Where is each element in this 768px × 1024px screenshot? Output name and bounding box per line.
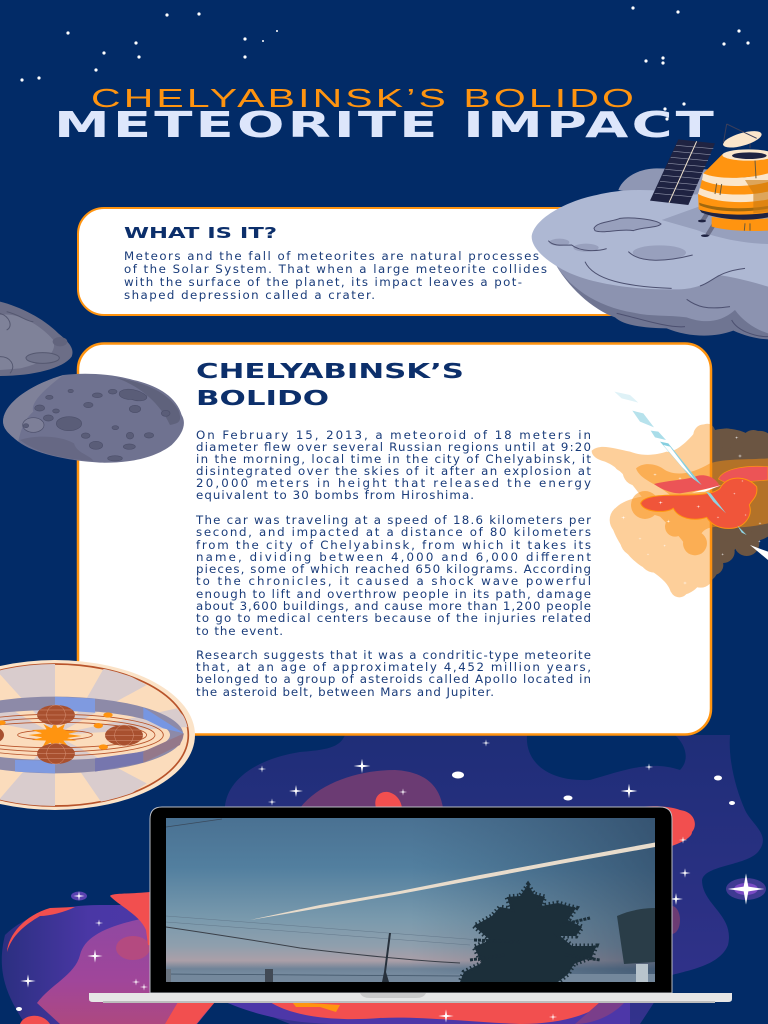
text block: paragraph 2: to go to medical centers because of the injuries related	[196, 611, 591, 625]
text block: paragraph 1: On February 15, 2013, a meteoroid of 18 meters in	[196, 428, 591, 442]
station body	[698, 149, 768, 231]
text block: paragraph 3: belonged to a group of asteroids called Apollo located in	[196, 672, 591, 686]
text block: definition	[124, 249, 547, 302]
panel: chelyabinsk's bolido	[78, 344, 711, 734]
asteroid with space station	[532, 124, 768, 339]
text block: definition: shaped depression called a crater.	[124, 288, 375, 302]
explosion sparks	[621, 436, 762, 585]
solar system	[0, 660, 195, 810]
text block: paragraph 2: from the city of Chelyabinsk, from which it takes its	[196, 538, 591, 552]
text block: paragraph 2: to the chronicles, it caused a shock wave powerful	[196, 574, 591, 588]
craters	[548, 218, 768, 337]
text block: paragraph 1: 20,000 meters in height that released the energy	[196, 476, 591, 490]
laptop frame	[150, 807, 672, 993]
sector wedges	[0, 663, 193, 810]
asteroid midsection	[553, 247, 768, 333]
text block: definition: of the Solar System. That when a large meteorite collides	[124, 262, 547, 276]
text block: paragraph 3: Research suggests that it was a condritic-type meteorite	[196, 648, 591, 662]
title line: Chelyabinsk's Bolido: CHELYABINSK’S BOLIDO	[91, 83, 637, 113]
heading: chelyabinsk's bolido: CHELYABINSK’S	[196, 359, 464, 383]
text block: paragraph 1: diameter flew over several Russian regions until at 9:20	[196, 440, 591, 454]
title line: Meteorite Impact: METEORITE IMPACT	[54, 105, 717, 146]
meteor streaks	[614, 392, 768, 560]
text block: definition: with the surface of the planet, its impact leaves a pot-	[124, 275, 522, 289]
asteroid rear hump	[618, 168, 740, 213]
outer blast cloud	[592, 424, 768, 597]
satellite dish	[721, 124, 763, 151]
text block: paragraph 2: pieces, some of which reached 650 kilograms. According	[196, 562, 591, 576]
text block: definition: Meteors and the fall of meteorites are natural processes	[124, 249, 539, 263]
middle blast cloud	[631, 458, 768, 555]
pine tree	[460, 885, 600, 982]
heading: chelyabinsk's bolido: BOLIDO	[196, 386, 329, 410]
meteor trail	[250, 842, 655, 920]
text block: paragraph 2: about 3,600 buildings, and cause more than 1,200 people	[196, 599, 591, 613]
asteroid underside	[553, 247, 768, 339]
text block: paragraph 1: disintegrated over the skies of it after an explosion at	[196, 464, 591, 478]
photo: meteor trail	[166, 818, 655, 982]
bottom nebula	[2, 735, 766, 1024]
title	[54, 83, 717, 146]
panel: what is it	[78, 208, 678, 315]
solar panel	[650, 139, 715, 205]
asteroid: partial upper left	[0, 302, 73, 376]
laptop base	[89, 993, 732, 1002]
laptop	[89, 807, 732, 1003]
station shadow	[662, 205, 768, 244]
asteroid: large	[3, 374, 184, 463]
text block: paragraph 2: name, dividing between 4,000 and 6,000 different	[196, 550, 591, 564]
text block: paragraph 1: equivalent to 30 bombs from Hiroshima.	[196, 488, 474, 502]
text block: paragraph 2: to the event.	[196, 624, 283, 638]
orbits	[0, 714, 163, 756]
text block: paragraph 3: the asteroid belt, between Mars and Jupiter.	[196, 685, 494, 699]
heading: what is it: WHAT IS IT?	[124, 224, 277, 242]
heading: chelyabinsk's bolido	[196, 359, 464, 410]
text block: paragraph 2	[195, 513, 591, 638]
utility pole	[382, 933, 391, 982]
water tank	[617, 908, 655, 964]
text block: paragraph 2: enough to lift and overthrow people in its path, damage	[196, 587, 591, 601]
text block: paragraph 1	[196, 428, 591, 502]
text block: paragraph 3	[196, 648, 591, 699]
text block: paragraph 3: that, at an age of approximately 4,452 million years,	[196, 660, 591, 674]
star field: top stars	[20, 6, 750, 121]
station legs	[698, 212, 717, 237]
sun	[28, 722, 82, 750]
explosion	[592, 392, 768, 597]
text block: paragraph 2: second, and impacted at a distance of 80 kilometers	[196, 525, 591, 539]
orbital ring band	[0, 697, 184, 773]
planets	[0, 705, 143, 764]
asteroid top surface	[532, 190, 768, 289]
inner fireball	[641, 466, 768, 528]
orbiting dots	[0, 712, 113, 750]
text block: paragraph 2: The car was traveling at a speed of 18.6 kilometers per	[195, 513, 591, 527]
text block: paragraph 1: in the morning, local time in the city of Chelyabinsk, it	[196, 452, 591, 466]
star field: nebula stars	[16, 739, 766, 1023]
